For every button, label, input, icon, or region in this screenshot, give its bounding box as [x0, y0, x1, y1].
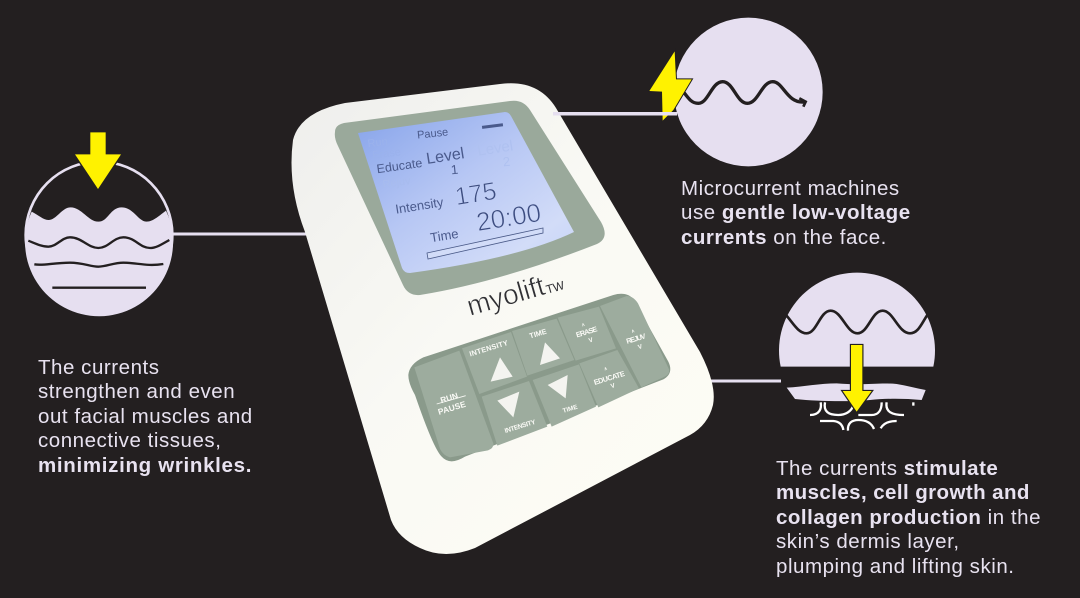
text block: left: out facial muscles and	[38, 405, 253, 428]
keypad: ERASE	[575, 324, 599, 339]
LCD screen: Intensity	[394, 194, 445, 217]
connector: device to right icon	[706, 380, 781, 382]
keypad: ∧	[603, 366, 608, 371]
icon: compressed skin layers with arrow	[25, 132, 173, 316]
text block: top right: currents on the face.	[681, 226, 887, 249]
text block: left: minimizing wrinkles.	[38, 454, 252, 477]
connector: device to top icon	[553, 112, 677, 116]
text block: bottom right: The currents stimulate	[776, 457, 998, 480]
LCD screen: Erase	[372, 146, 402, 162]
LCD screen: Rejuv	[382, 175, 412, 191]
brand name: myoliftTW	[463, 265, 567, 322]
keypad	[408, 294, 670, 461]
LCD screen: 20:00	[474, 197, 543, 237]
keypad: INTENSITY	[504, 419, 537, 435]
text block: bottom right: collagen production in the	[776, 506, 1041, 529]
LCD screen: Educate	[376, 156, 423, 176]
LCD screen: Level	[476, 137, 514, 160]
keypad: V	[637, 343, 644, 351]
text block: left	[38, 356, 253, 477]
text block: top right: Microcurrent machines	[681, 177, 900, 200]
device shell	[292, 83, 714, 554]
text block: left: connective tissues,	[38, 429, 221, 452]
LCD screen: 1	[450, 162, 459, 177]
text block: top right: use gentle low-voltage	[681, 201, 911, 224]
text block: bottom right	[776, 457, 1041, 578]
text block: left: The currents	[38, 356, 160, 379]
keypad: V	[610, 382, 617, 390]
text block: bottom right: muscles, cell growth and	[776, 481, 1030, 504]
LCD screen: Time	[429, 226, 459, 245]
text block: bottom right: plumping and lifting skin.	[776, 555, 1015, 578]
text block: bottom right: skin’s dermis layer,	[776, 530, 960, 553]
keypad: INTENSITY	[468, 338, 509, 358]
keypad: TIME	[562, 404, 578, 415]
keypad: REJUV	[625, 331, 647, 346]
keypad: ∧	[581, 322, 586, 327]
LCD screen: Level	[425, 145, 466, 168]
LCD screen: Run	[367, 136, 388, 150]
LCD screen	[358, 112, 574, 273]
keypad: PAUSE	[437, 399, 467, 417]
LCD screen: 175	[453, 177, 499, 211]
LCD screen: 2	[502, 154, 511, 169]
keypad: ∧	[631, 328, 636, 334]
text block: left: strengthen and even	[38, 380, 235, 403]
keypad: EDUCATE	[593, 369, 626, 387]
keypad: TIME	[528, 327, 548, 340]
icon: microcurrent wave with lightning bolt	[649, 18, 823, 166]
text block: top right	[681, 177, 911, 249]
connector: left icon to device	[172, 232, 308, 236]
screen bezel	[335, 101, 605, 295]
LCD screen: Pause	[417, 126, 449, 142]
icon: currents penetrating dermis layer	[779, 273, 935, 431]
panel: device	[292, 83, 714, 554]
keypad: RUN	[439, 390, 459, 405]
keypad: V	[588, 336, 595, 345]
